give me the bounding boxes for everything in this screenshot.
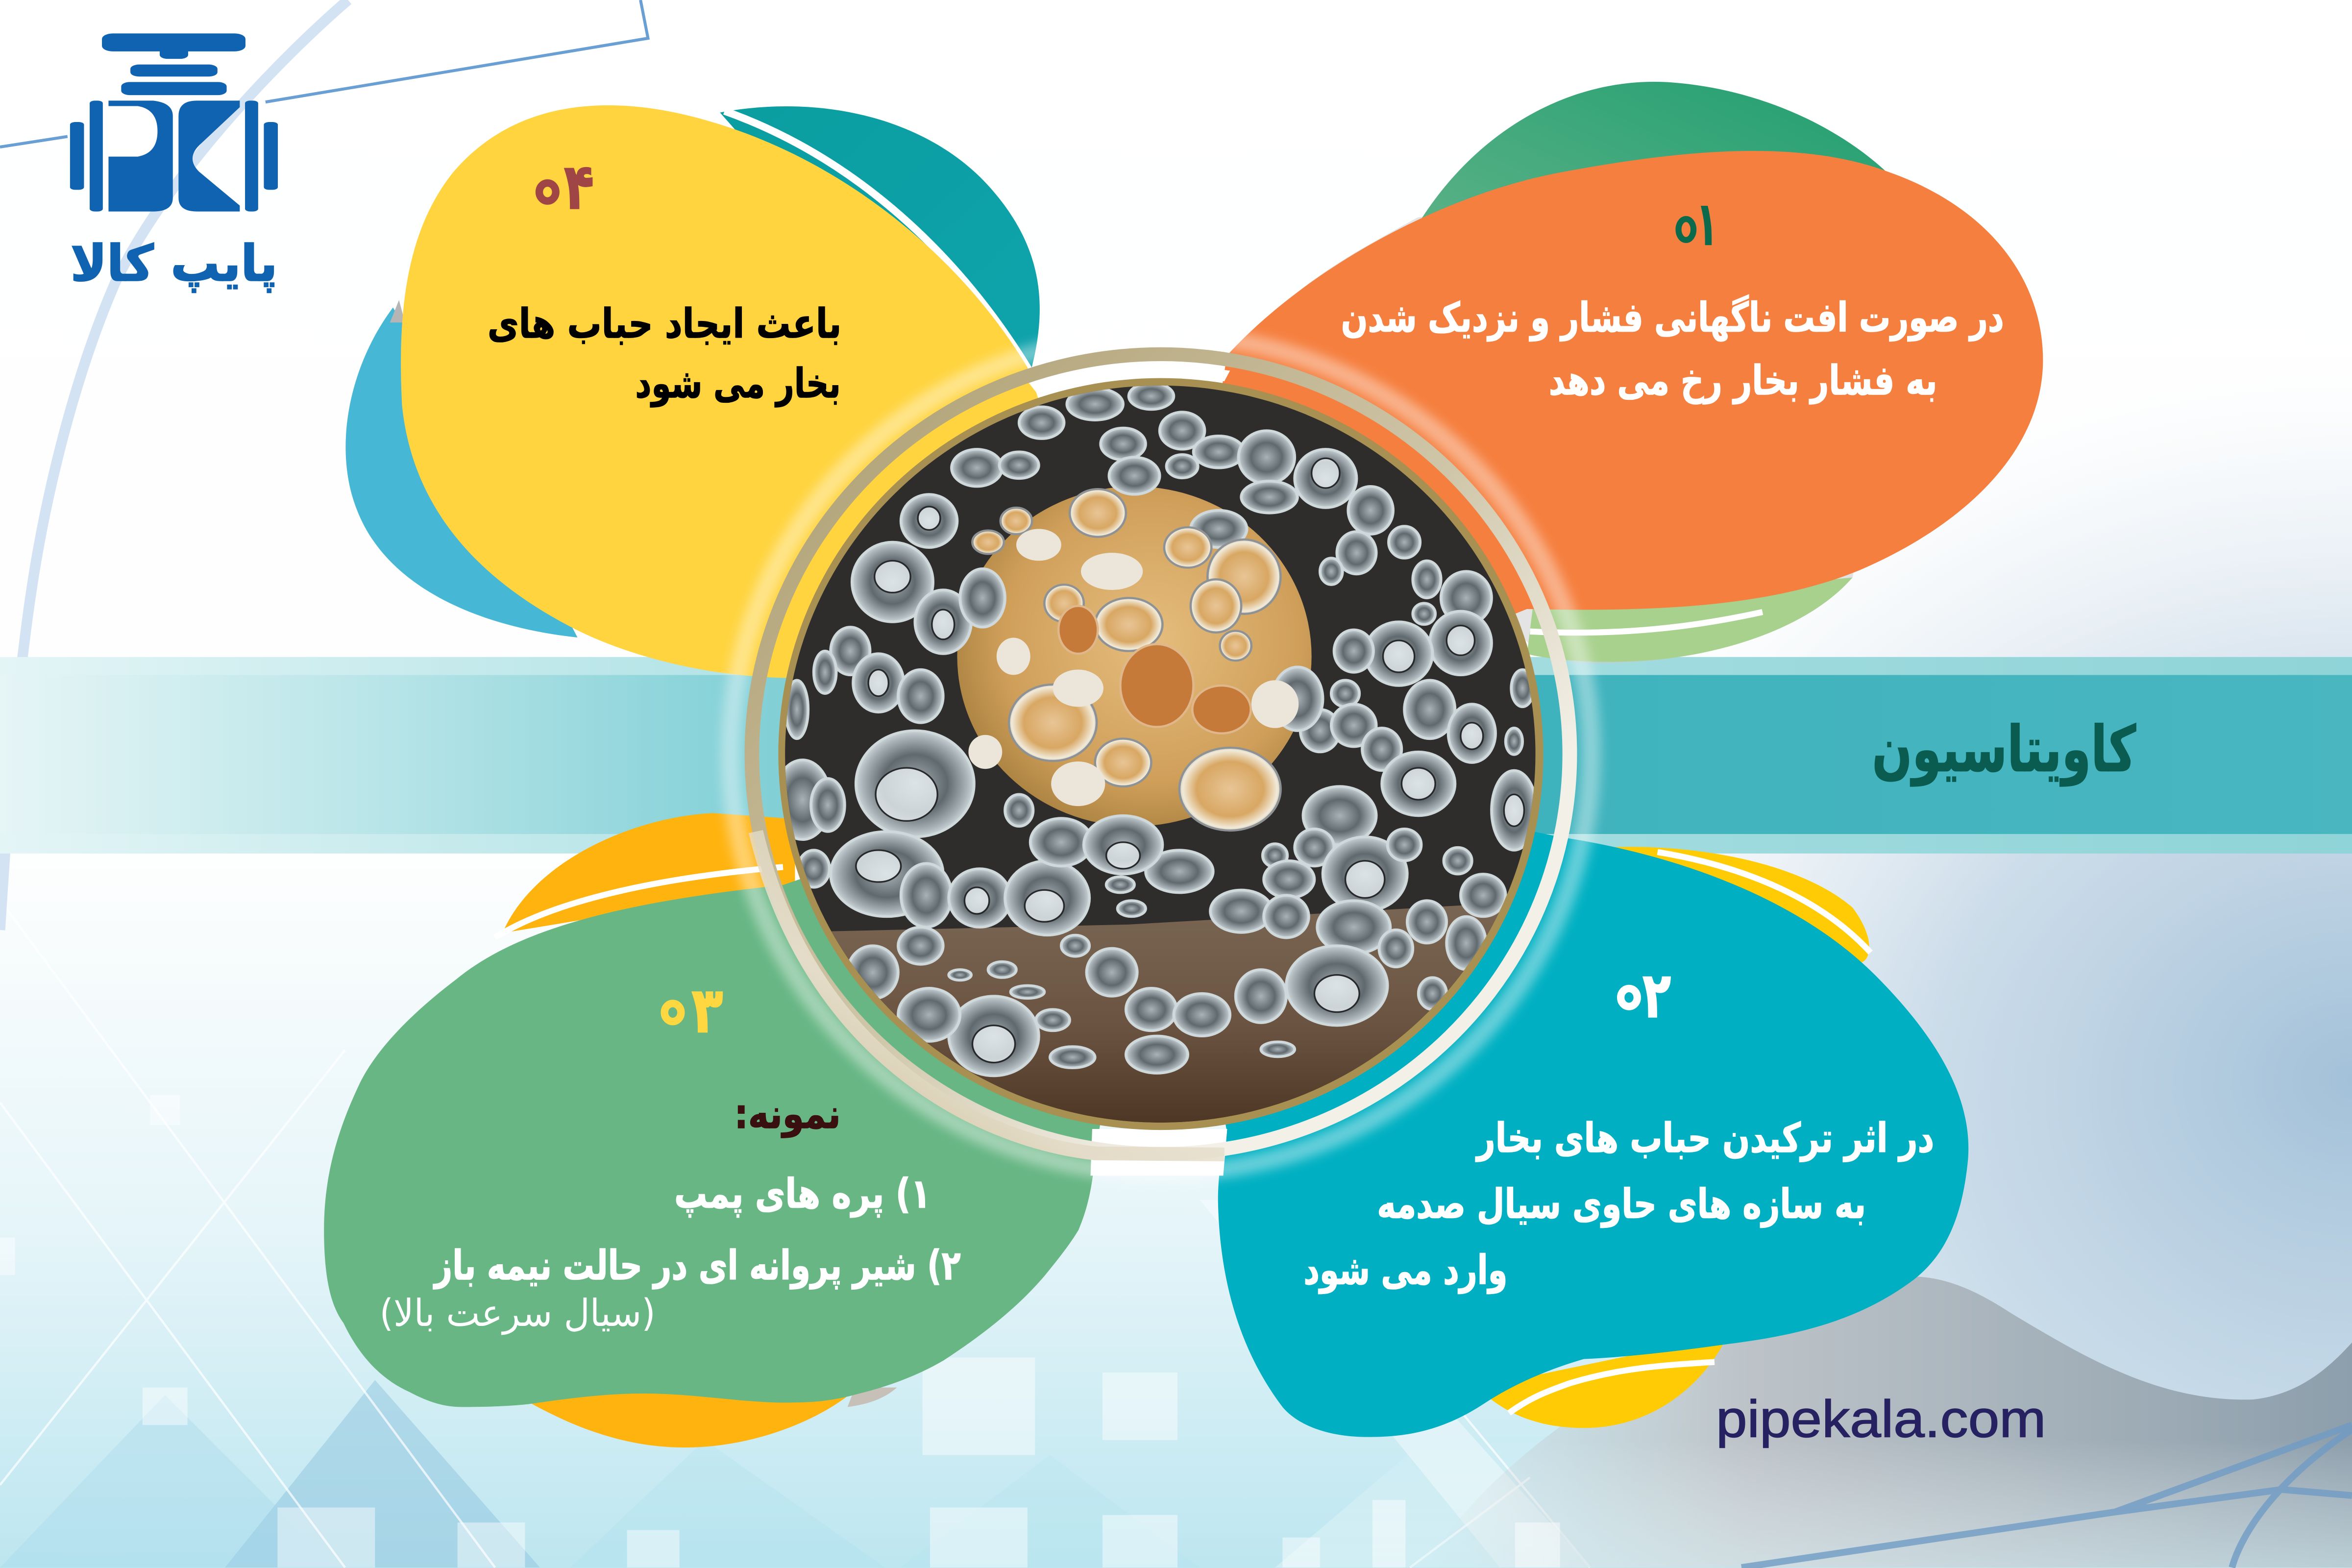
panel back: petal 02 yellow — [1477, 847, 1870, 1428]
white sector bottom — [1091, 1129, 1227, 1176]
text block 02: وارد می شود — [1303, 1247, 1508, 1294]
title: کاویتاسیون — [1872, 713, 2136, 786]
text block 03: نمونه: — [734, 1091, 841, 1138]
panel: petal 04 yellow — [401, 105, 1162, 755]
text block 02: در اثر ترکیدن حباب های بخار — [1475, 1115, 1934, 1162]
outer ring — [752, 354, 1570, 1154]
orange bubbles — [1058, 606, 1251, 734]
panel back: petal 01 green — [1162, 82, 1905, 755]
text block 01: در صورت افت ناگهانی فشار و نزدیک شدن — [1341, 294, 2004, 342]
central band — [0, 657, 2352, 854]
logo wordmark: پایپ کالا — [71, 234, 277, 293]
panel: petal 02 teal — [1162, 755, 1968, 1437]
decorative frame lines top left — [0, 0, 648, 930]
logo mark — [70, 33, 278, 212]
website url: pipekala.com — [1716, 1390, 2046, 1448]
text block 04: باعث ایجاد حباب های — [488, 300, 841, 347]
golden bubbles — [972, 489, 1281, 831]
number 04: ۰۴ — [534, 151, 594, 224]
outer ring lower left — [756, 832, 1225, 1154]
panel back: petal 03 orange — [495, 813, 897, 1447]
text block 02 — [1303, 1115, 1934, 1294]
panel: petal 03 green — [324, 755, 1162, 1407]
photo: bubbles — [774, 380, 1545, 1129]
panel back: petal 04 teal and blue — [345, 106, 1040, 637]
bubble highlights — [856, 458, 1524, 1062]
text block 04: بخار می شود — [635, 360, 841, 408]
number 01: ۰۱ — [1675, 189, 1717, 259]
soft glow ring — [731, 335, 1591, 1174]
pale bubbles — [968, 529, 1298, 806]
logo — [70, 33, 278, 293]
text block 01: به فشار بخار رخ می دهد — [1549, 357, 1937, 404]
text block 04 — [488, 300, 841, 408]
number 01 — [1675, 189, 1717, 259]
number 02: ۰۲ — [1614, 959, 1671, 1032]
gold sphere — [957, 487, 1312, 826]
decorative squares — [0, 1095, 1560, 1568]
decorative wave bottom right — [1275, 1276, 2352, 1568]
white sector top — [1028, 366, 1230, 392]
panel: petal 01 orange — [1162, 151, 2043, 755]
text block 01 — [1341, 294, 2004, 404]
text block 03: (سیال سرعت بالا) — [379, 1292, 656, 1335]
clear bubbles — [774, 383, 1537, 1076]
number 03: ۰۳ — [660, 974, 723, 1047]
central circular photo with rings — [731, 335, 1591, 1176]
text block 02: به سازه های حاوی سیال صدمه — [1377, 1181, 1866, 1228]
text block 03: ۱) پره های پمپ — [674, 1170, 931, 1218]
gold ring — [778, 378, 1544, 1130]
text block 03 — [379, 1091, 961, 1335]
text block 03: ۲) شیر پروانه ای در حالت نیمه باز — [433, 1242, 961, 1290]
